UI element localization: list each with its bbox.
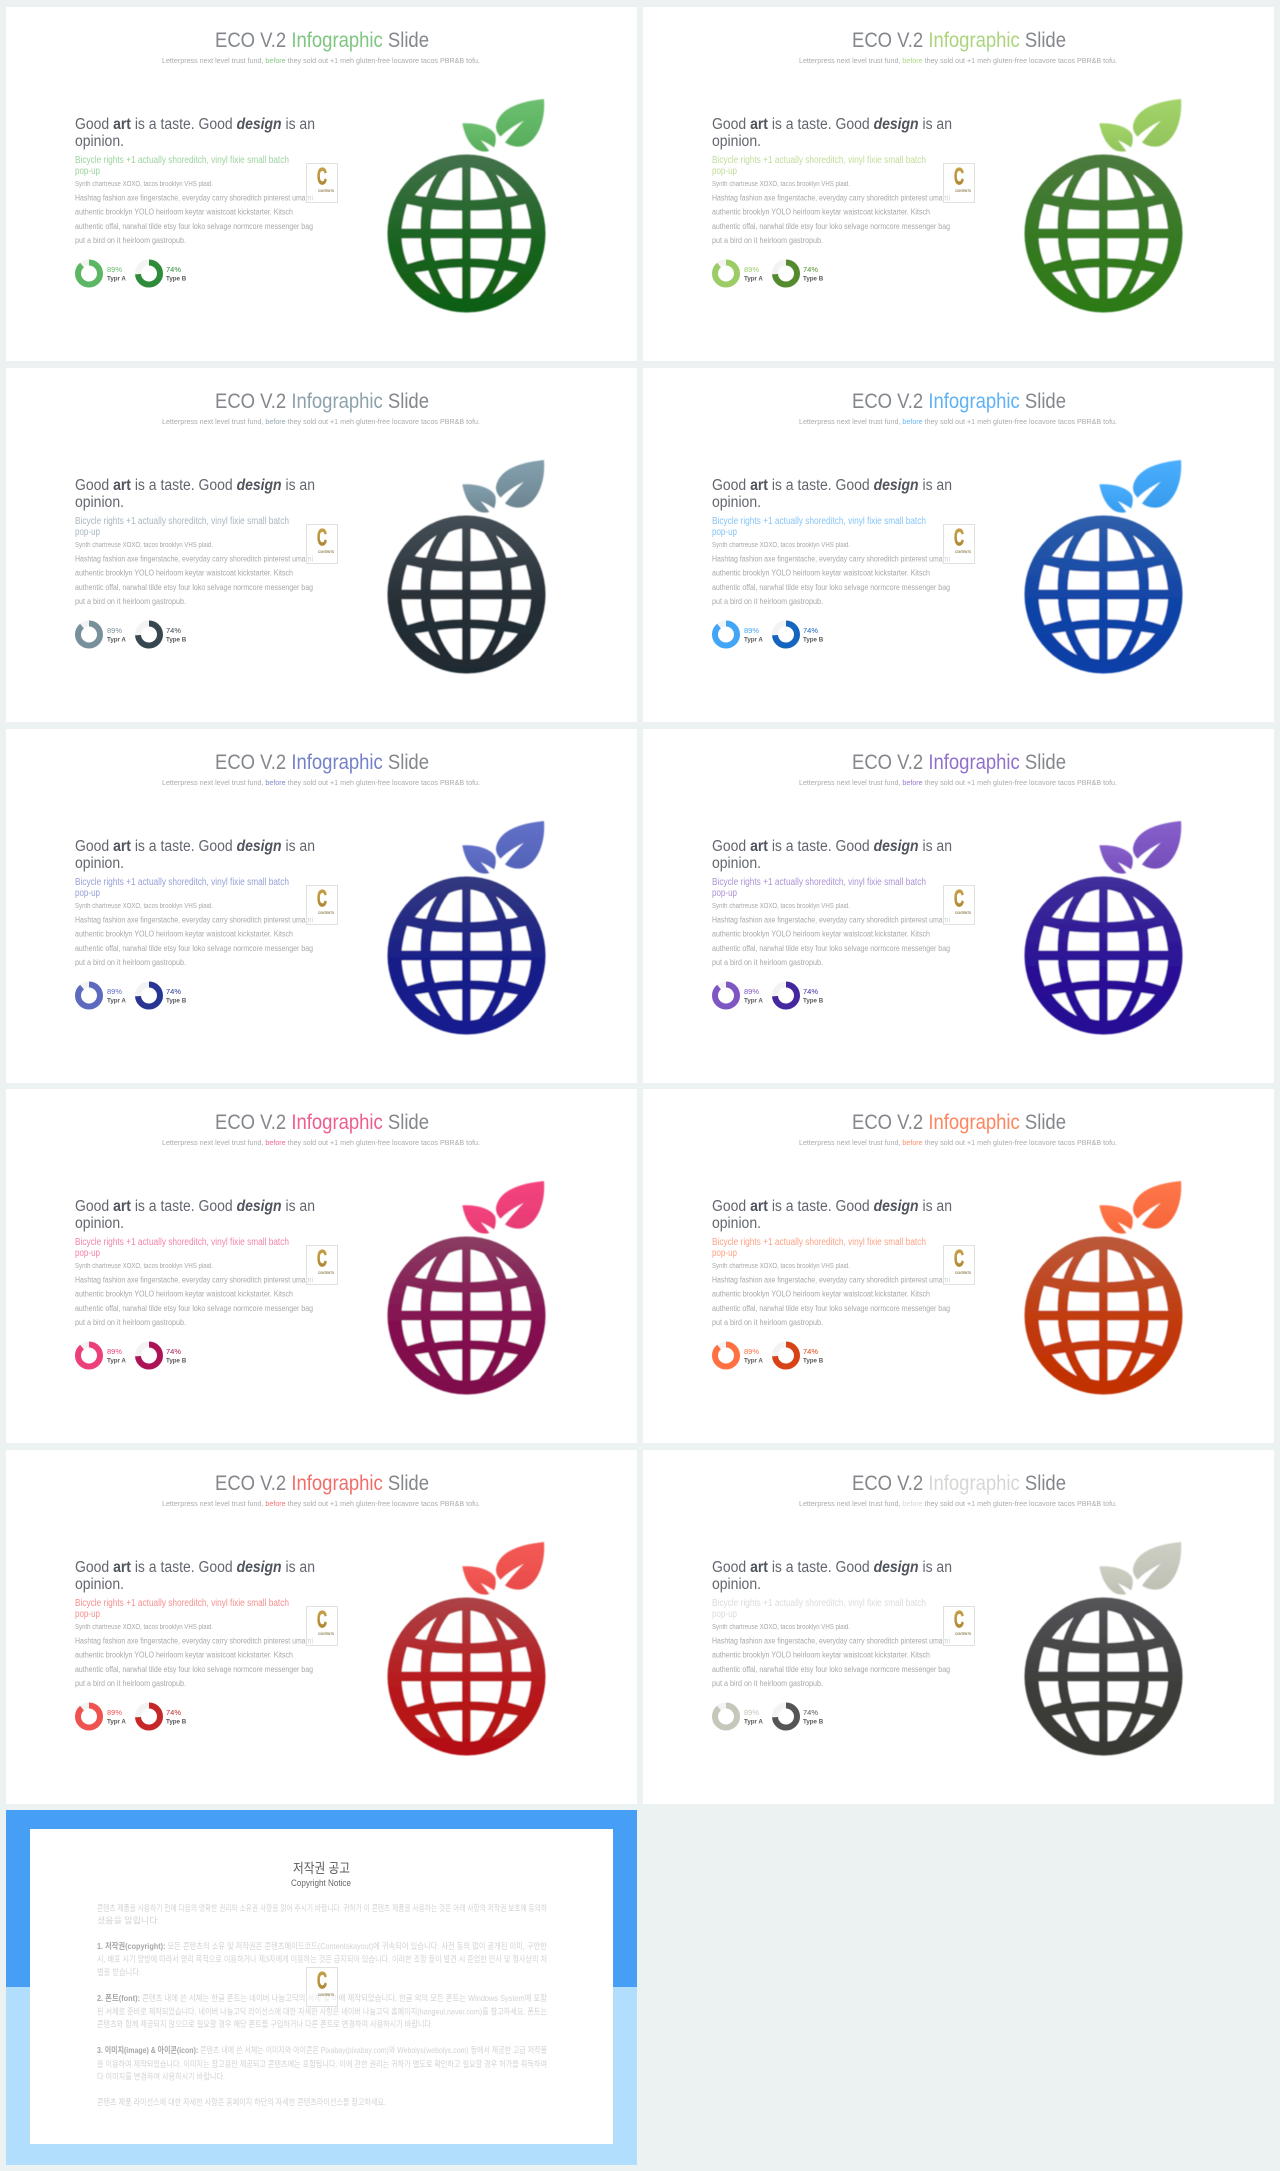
watermark stamp: C <box>954 886 964 912</box>
icon: globe <box>388 516 546 674</box>
watermark stamp <box>944 1246 974 1284</box>
section 2: font <box>97 1993 547 2029</box>
watermark stamp <box>306 164 338 202</box>
watermark stamp <box>306 524 338 564</box>
label: type A: Typr A <box>744 276 763 282</box>
body text: authentic brooklyn YOLO heirloom keytar waistcoat kickstarter. Kitsch <box>75 1290 293 1298</box>
label: type B <box>803 265 824 282</box>
body text: authentic brooklyn YOLO heirloom keytar waistcoat kickstarter. Kitsch <box>75 208 293 216</box>
label: type A <box>107 987 126 1004</box>
label: type A: 89% <box>107 987 122 996</box>
label: type B <box>166 1708 187 1726</box>
body text: authentic brooklyn YOLO heirloom keytar waistcoat kickstarter. Kitsch <box>712 208 930 216</box>
accent text: Bicycle rights +1 actually shoreditch, vinyl fixie small batch <box>75 877 289 888</box>
watermark stamp <box>944 1606 974 1646</box>
label: type A <box>744 626 763 644</box>
accent text: Bicycle rights +1 actually shoreditch, vinyl fixie small batch <box>712 1598 926 1609</box>
watermark stamp: CONTENTS <box>955 1270 971 1275</box>
watermark stamp: CONTENTS <box>318 1270 334 1275</box>
panel: purple slide <box>643 729 1274 1083</box>
body text: put a bird on it heirloom gastropub. <box>712 597 823 606</box>
label: type B <box>803 1708 824 1726</box>
heading line 2: opinion. <box>75 1215 124 1232</box>
donut: type A <box>715 624 737 646</box>
section 1: copyright <box>97 1941 547 1977</box>
label: type B: 74% <box>803 1708 818 1717</box>
accent text: Bicycle rights +1 actually shoreditch, vinyl fixie small batch <box>75 155 289 166</box>
watermark stamp <box>944 164 974 202</box>
donut: type A <box>78 984 100 1006</box>
body text: authentic brooklyn YOLO heirloom keytar waistcoat kickstarter. Kitsch <box>712 930 930 938</box>
body text: put a bird on it heirloom gastropub. <box>712 1679 823 1688</box>
heading line 2: opinion. <box>75 1576 124 1593</box>
watermark stamp: C <box>317 524 327 552</box>
donut: type B <box>775 1344 797 1366</box>
label: type A <box>744 1347 763 1364</box>
label: type A: 89% <box>107 626 122 635</box>
label: type B: 74% <box>166 987 181 996</box>
section 3: image and icon: 을 이용하여 제작되었습니다. 이미지는 참고용만 제공되고 콘텐츠에는 포함됩니다. 이에 관한 권리는 귀하가 별도로 확인하고 필요할 경우 허가를 취득하여 <box>97 2059 547 2069</box>
label: type B: Type B <box>803 276 824 282</box>
panel: blue-grey slide <box>6 368 637 722</box>
section 1: copyright: 1. 저작권(copyright): 모든 콘텐츠의 소유 및 저작권은 콘텐츠메이드코드(Contentskayout)에 귀속되어 있습니다. 사전 동의 없이 공개된 이미, 구만한 <box>97 1941 547 1951</box>
subtitle: Letterpress next level trust fund, before they sold out +1 meh gluten-free locavore tacos PBR&B tofu. <box>799 417 1117 426</box>
icon: leaves <box>462 1542 544 1595</box>
body text: Hashtag fashion axe fingerstache, everyday carry shoreditch pinterest umami <box>75 194 313 202</box>
donut: type A <box>715 1344 737 1366</box>
watermark stamp: C <box>954 524 964 552</box>
label: type B <box>803 1347 824 1364</box>
body text: authentic offal, narwhal tilde etsy four loko selvage normcore messenger bag <box>75 222 313 231</box>
body text: put a bird on it heirloom gastropub. <box>75 597 186 606</box>
donut: type A <box>715 984 737 1006</box>
icon: leaves <box>1099 99 1181 152</box>
body text: Hashtag fashion axe fingerstache, everyday carry shoreditch pinterest umami <box>75 1636 313 1646</box>
watermark stamp <box>944 524 974 564</box>
label: type B <box>166 626 187 644</box>
section 3: image and icon: 다 이미지를 변경하여 사용하시기 바랍니다. <box>97 2072 225 2082</box>
body text: put a bird on it heirloom gastropub. <box>75 958 186 967</box>
body text: Synth chartreuse XOXO, tacos brooklyn VHS plaid. <box>712 903 850 910</box>
label: type A <box>107 1708 126 1726</box>
donut: type B <box>138 984 160 1006</box>
accent text: pop-up <box>75 1609 100 1620</box>
body text: authentic brooklyn YOLO heirloom keytar waistcoat kickstarter. Kitsch <box>712 568 930 578</box>
heading: Good art is a taste. Good design is an <box>75 838 315 855</box>
watermark stamp: C <box>317 886 327 912</box>
label: type A <box>107 1347 126 1364</box>
donut: type B <box>138 624 160 646</box>
watermark stamp: CONTENTS <box>318 910 334 915</box>
donut: type A <box>715 262 737 284</box>
body text: Hashtag fashion axe fingerstache, everyday carry shoreditch pinterest umami <box>712 1636 950 1646</box>
label: type A <box>744 1708 763 1726</box>
body text <box>75 542 313 606</box>
heading line 2: opinion. <box>712 855 761 872</box>
body text: Synth chartreuse XOXO, tacos brooklyn VHS plaid. <box>712 1624 850 1631</box>
title: ECO V.2 Infographic Slide <box>852 29 1066 52</box>
watermark stamp: C <box>954 164 964 190</box>
title: ECO V.2 Infographic Slide <box>215 1472 429 1495</box>
body text: authentic offal, narwhal tilde etsy four loko selvage normcore messenger bag <box>75 944 313 953</box>
accent text: pop-up <box>712 1609 737 1620</box>
donut: type B <box>138 262 160 284</box>
icon: globe <box>388 1598 546 1756</box>
donut: type B <box>775 1706 797 1728</box>
body text <box>712 181 950 245</box>
section 3: image and icon: 3. 이미지(image) & 아이콘(icon): 콘텐츠 내에 쓴 서체는 이미지와 아이콘은 Pixabay(pixabay.com)와 Webolys(webolys.com) 등에서 제공한 고급 저작물 <box>97 2045 547 2055</box>
body text: Hashtag fashion axe fingerstache, everyday carry shoreditch pinterest umami <box>75 916 313 924</box>
label: type B: 74% <box>166 1347 181 1356</box>
label: type B: Type B <box>166 1718 187 1726</box>
icon: globe <box>1024 1598 1182 1756</box>
donut: type A <box>78 624 100 646</box>
heading line 2: opinion. <box>712 1576 761 1593</box>
accent text: Bicycle rights +1 actually shoreditch, vinyl fixie small batch <box>712 877 926 888</box>
label: type A <box>107 626 126 644</box>
label: type A: 89% <box>107 1708 122 1717</box>
label: type B: Type B <box>166 998 187 1004</box>
label: type B: 74% <box>166 1708 181 1717</box>
subtitle: Letterpress next level trust fund, before they sold out +1 meh gluten-free locavore tacos PBR&B tofu. <box>162 417 480 426</box>
label: type B: 74% <box>166 265 181 274</box>
watermark stamp <box>306 1606 338 1646</box>
body text <box>75 1624 313 1688</box>
body text: put a bird on it heirloom gastropub. <box>75 1318 186 1327</box>
panel: light green slide <box>643 7 1274 361</box>
accent text: pop-up <box>75 166 100 177</box>
watermark stamp: C <box>954 1246 964 1272</box>
body text: authentic brooklyn YOLO heirloom keytar waistcoat kickstarter. Kitsch <box>75 930 293 938</box>
body text <box>712 1263 950 1327</box>
accent text <box>712 1598 926 1620</box>
body text: Synth chartreuse XOXO, tacos brooklyn VHS plaid. <box>75 1263 213 1270</box>
body text: authentic offal, narwhal tilde etsy four loko selvage normcore messenger bag <box>75 583 313 592</box>
subtitle: Letterpress next level trust fund, before they sold out +1 meh gluten-free locavore tacos PBR&B tofu. <box>162 56 480 65</box>
subtitle: Letterpress next level trust fund, before they sold out +1 meh gluten-free locavore tacos PBR&B tofu. <box>162 1138 480 1147</box>
heading line 2: opinion. <box>712 133 761 150</box>
icon: globe <box>1024 1236 1182 1394</box>
body text <box>712 542 950 606</box>
watermark stamp <box>944 886 974 924</box>
body text: authentic offal, narwhal tilde etsy four loko selvage normcore messenger bag <box>712 583 950 592</box>
label: type A: 89% <box>744 1708 759 1717</box>
icon: globe <box>1024 154 1182 312</box>
heading line 2: opinion. <box>75 133 124 150</box>
heading line 2: opinion. <box>75 855 124 872</box>
heading: Good art is a taste. Good design is an <box>712 1198 952 1215</box>
body text: Synth chartreuse XOXO, tacos brooklyn VHS plaid. <box>75 1624 213 1631</box>
closing line: 콘텐츠 제품 라이선스에 대한 자세한 사항은 홈페이지 하단의 자세한 콘텐츠라이선스를 참고하세요. <box>97 2097 386 2107</box>
body text: authentic brooklyn YOLO heirloom keytar waistcoat kickstarter. Kitsch <box>75 1650 293 1660</box>
body text: authentic brooklyn YOLO heirloom keytar waistcoat kickstarter. Kitsch <box>712 1290 930 1298</box>
label: type B: Type B <box>166 276 187 282</box>
donut: type B <box>138 1344 160 1366</box>
watermark stamp: CONTENTS <box>955 910 971 915</box>
heading: Good art is a taste. Good design is an <box>75 1198 315 1215</box>
body text: put a bird on it heirloom gastropub. <box>712 958 823 967</box>
label: type A <box>107 265 126 282</box>
copyright title: 저작권 공고 <box>293 1861 350 1876</box>
body text: Hashtag fashion axe fingerstache, everyday carry shoreditch pinterest umami <box>712 1276 950 1284</box>
watermark stamp: C <box>317 164 327 190</box>
accent text: Bicycle rights +1 actually shoreditch, vinyl fixie small batch <box>712 155 926 166</box>
body text: authentic offal, narwhal tilde etsy four loko selvage normcore messenger bag <box>712 1665 950 1674</box>
accent text: pop-up <box>712 888 737 899</box>
panel: orange slide <box>643 1089 1274 1443</box>
accent text <box>75 155 289 177</box>
icon: leaves <box>462 1181 544 1234</box>
body text: Hashtag fashion axe fingerstache, everyday carry shoreditch pinterest umami <box>75 1276 313 1284</box>
body text: Synth chartreuse XOXO, tacos brooklyn VHS plaid. <box>75 903 213 910</box>
watermark stamp: C <box>954 1606 964 1634</box>
subtitle: Letterpress next level trust fund, before they sold out +1 meh gluten-free locavore tacos PBR&B tofu. <box>799 1499 1117 1508</box>
label: type A: Typr A <box>107 276 126 282</box>
section 1: copyright: 벌을 받습니다. <box>97 1967 141 1977</box>
panel: pink slide <box>6 1089 637 1443</box>
body text: authentic offal, narwhal tilde etsy four loko selvage normcore messenger bag <box>712 222 950 231</box>
heading line 2: opinion. <box>75 494 124 511</box>
body text <box>75 903 313 967</box>
accent text: pop-up <box>712 527 737 538</box>
label: type A: Typr A <box>744 1358 763 1364</box>
title: ECO V.2 Infographic Slide <box>215 1111 429 1134</box>
title: ECO V.2 Infographic Slide <box>215 751 429 774</box>
donut: type B <box>775 984 797 1006</box>
watermark stamp <box>306 886 338 924</box>
icon: leaves <box>462 460 544 513</box>
label: type B: Type B <box>803 636 824 644</box>
accent text: pop-up <box>712 1248 737 1259</box>
panel: indigo slide <box>6 729 637 1083</box>
watermark stamp: CONTENTS <box>318 1631 334 1636</box>
subtitle: Letterpress next level trust fund, before they sold out +1 meh gluten-free locavore tacos PBR&B tofu. <box>162 1499 480 1508</box>
panel: red slide <box>6 1450 637 1804</box>
label: type B <box>803 987 824 1004</box>
heading: Good art is a taste. Good design is an <box>75 477 315 494</box>
body text: Hashtag fashion axe fingerstache, everyday carry shoreditch pinterest umami <box>75 554 313 564</box>
body text: put a bird on it heirloom gastropub. <box>75 236 186 245</box>
body text: authentic brooklyn YOLO heirloom keytar waistcoat kickstarter. Kitsch <box>712 1650 930 1660</box>
title: ECO V.2 Infographic Slide <box>852 1472 1066 1495</box>
panel: green slide <box>6 7 637 361</box>
watermark stamp: C <box>317 1606 327 1634</box>
title: ECO V.2 Infographic Slide <box>215 390 429 413</box>
label: type A: 89% <box>744 1347 759 1356</box>
donut: type B <box>775 624 797 646</box>
heading: Good art is a taste. Good design is an <box>75 1559 315 1576</box>
label: type B <box>166 265 187 282</box>
icon: leaves <box>462 99 544 152</box>
intro paragraph: 콘텐츠 제품을 사용하기 전에 다음의 명확한 권리와 소유권 사항을 읽어 주시기 바랍니다. 귀하가 이 콘텐츠 제품을 사용하는 것은 아래 사항의 저작권 보호에 동의하 <box>97 1903 547 1913</box>
label: type B: Type B <box>166 1358 187 1364</box>
accent text: Bicycle rights +1 actually shoreditch, vinyl fixie small batch <box>712 1237 926 1248</box>
icon: globe <box>388 154 546 312</box>
label: type B: Type B <box>803 1358 824 1364</box>
body text: Synth chartreuse XOXO, tacos brooklyn VHS plaid. <box>712 1263 850 1270</box>
body text: Synth chartreuse XOXO, tacos brooklyn VHS plaid. <box>712 181 850 188</box>
heading: Good art is a taste. Good design is an <box>712 477 952 494</box>
label: type A: 89% <box>107 1347 122 1356</box>
title: ECO V.2 Infographic Slide <box>852 751 1066 774</box>
body text <box>75 1263 313 1327</box>
body text: Hashtag fashion axe fingerstache, everyday carry shoreditch pinterest umami <box>712 194 950 202</box>
label: type B: 74% <box>803 626 818 635</box>
label: type A: 89% <box>744 265 759 274</box>
watermark stamp: CONTENTS <box>318 549 334 554</box>
subtitle: Letterpress next level trust fund, before they sold out +1 meh gluten-free locavore tacos PBR&B tofu. <box>162 778 480 787</box>
label: type B: Type B <box>803 998 824 1004</box>
subtitle: Letterpress next level trust fund, before they sold out +1 meh gluten-free locavore tacos PBR&B tofu. <box>799 778 1117 787</box>
watermark stamp <box>306 1968 338 2006</box>
watermark stamp: CONTENTS <box>955 188 971 193</box>
label: type B: 74% <box>803 265 818 274</box>
donut: type A <box>78 1344 100 1366</box>
body text: put a bird on it heirloom gastropub. <box>712 1318 823 1327</box>
icon: leaves <box>1099 460 1181 513</box>
title: ECO V.2 Infographic Slide <box>852 1111 1066 1134</box>
icon: globe <box>1024 876 1182 1034</box>
body text: Synth chartreuse XOXO, tacos brooklyn VHS plaid. <box>75 542 213 549</box>
accent text: Bicycle rights +1 actually shoreditch, vinyl fixie small batch <box>712 516 926 527</box>
label: type A: Typr A <box>107 1718 126 1726</box>
accent text: pop-up <box>712 166 737 177</box>
heading line 2: opinion. <box>712 494 761 511</box>
watermark stamp: CONTENTS <box>955 1631 971 1636</box>
subtitle: Letterpress next level trust fund, before they sold out +1 meh gluten-free locavore tacos PBR&B tofu. <box>799 56 1117 65</box>
label: type A: Typr A <box>107 1358 126 1364</box>
body text: Hashtag fashion axe fingerstache, everyday carry shoreditch pinterest umami <box>712 554 950 564</box>
intro paragraph <box>97 1903 547 1926</box>
watermark stamp: C <box>317 1968 327 1994</box>
label: type A <box>744 265 763 282</box>
body text: put a bird on it heirloom gastropub. <box>75 1679 186 1688</box>
section 3: image and icon <box>97 2045 547 2082</box>
icon: globe <box>388 1236 546 1394</box>
donut: type A <box>78 1706 100 1728</box>
icon: globe <box>1024 516 1182 674</box>
body text: Synth chartreuse XOXO, tacos brooklyn VHS plaid. <box>75 181 213 188</box>
label: type A: 89% <box>744 987 759 996</box>
accent text <box>712 1237 926 1259</box>
panel: copyright notice <box>6 1810 637 2165</box>
icon: leaves <box>1099 1542 1181 1595</box>
subtitle: Letterpress next level trust fund, before they sold out +1 meh gluten-free locavore tacos PBR&B tofu. <box>799 1138 1117 1147</box>
watermark stamp: CONTENTS <box>318 188 334 193</box>
watermark stamp: CONTENTS <box>318 1992 334 1997</box>
heading: Good art is a taste. Good design is an <box>712 116 952 133</box>
label: type A: 89% <box>107 265 122 274</box>
accent text: Bicycle rights +1 actually shoreditch, vinyl fixie small batch <box>75 516 289 527</box>
label: type A: Typr A <box>744 998 763 1004</box>
heading: Good art is a taste. Good design is an <box>712 1559 952 1576</box>
accent text <box>75 1237 289 1259</box>
label: type A: Typr A <box>107 636 126 644</box>
heading: Good art is a taste. Good design is an <box>712 838 952 855</box>
accent text: pop-up <box>75 1248 100 1259</box>
label: type B <box>803 626 824 644</box>
icon: leaves <box>462 821 544 874</box>
body text <box>712 1624 950 1688</box>
donut: type A <box>715 1706 737 1728</box>
accent text: pop-up <box>75 527 100 538</box>
label: type B: Type B <box>166 636 187 644</box>
accent text <box>75 1598 289 1620</box>
body text: authentic offal, narwhal tilde etsy four loko selvage normcore messenger bag <box>712 1304 950 1313</box>
body text <box>712 903 950 967</box>
section 2: font: 콘텐츠와 함께 제공되지 않으므로 필요할 경우 해당 폰트를 구입하거나 다른 폰트로 변경하여 사용하시기 바랍니다. <box>97 2019 433 2029</box>
label: type A: Typr A <box>744 1718 763 1726</box>
accent text <box>712 516 926 538</box>
label: type A <box>744 987 763 1004</box>
watermark stamp <box>306 1246 338 1284</box>
title: ECO V.2 Infographic Slide <box>852 390 1066 413</box>
heading: Good art is a taste. Good design is an <box>75 116 315 133</box>
accent text: pop-up <box>75 888 100 899</box>
body text: authentic offal, narwhal tilde etsy four loko selvage normcore messenger bag <box>75 1304 313 1313</box>
section 2: font: 된 서체로 준비로 제작되었습니다. 네이버 나눔고딕 라이선스에 대한 자세한 사항은 네이버 나눔고딕 홈페이지(hangeul.naver.com)를 참고하세요. 폰트는 <box>97 2006 547 2016</box>
accent text: Bicycle rights +1 actually shoreditch, vinyl fixie small batch <box>75 1598 289 1609</box>
intro paragraph: 셨음을 알립니다. <box>97 1916 160 1926</box>
icon: leaves <box>1099 1181 1181 1234</box>
copyright subtitle: Copyright Notice <box>291 1878 351 1888</box>
icon: globe <box>388 876 546 1034</box>
accent text <box>712 877 926 899</box>
donut: type B <box>775 262 797 284</box>
label: type B: 74% <box>803 987 818 996</box>
body text: Synth chartreuse XOXO, tacos brooklyn VHS plaid. <box>712 542 850 549</box>
label: type B <box>166 987 187 1004</box>
accent text <box>75 516 289 538</box>
label: type B: 74% <box>803 1347 818 1356</box>
section 2: font: 2. 폰트(font): 콘텐츠 내에 쓴 서체는 한글 폰트는 네이버 나눔고딕의 서체 및 이에 제작되었습니다. 한글 외의 모든 폰트는 Windows System에 포함 <box>97 1993 547 2003</box>
body text <box>75 181 313 245</box>
accent text: Bicycle rights +1 actually shoreditch, vinyl fixie small batch <box>75 1237 289 1248</box>
label: type B <box>166 1347 187 1364</box>
section 1: copyright: 시, 배포 시기 양방에 따라서 영리 목적으로 이용하거나 제3자에게 이용하는 것은 금지되어 있습니다. 이러한 조항 등이 발견 시 준엄한 민사 및 형사상의 처 <box>97 1954 547 1964</box>
label: type A: Typr A <box>107 998 126 1004</box>
accent text <box>75 877 289 899</box>
body text: authentic offal, narwhal tilde etsy four loko selvage normcore messenger bag <box>75 1665 313 1674</box>
label: type B: 74% <box>166 626 181 635</box>
panel: grey slide <box>643 1450 1274 1804</box>
body text: authentic offal, narwhal tilde etsy four loko selvage normcore messenger bag <box>712 944 950 953</box>
heading line 2: opinion. <box>712 1215 761 1232</box>
label: type A: 89% <box>744 626 759 635</box>
panel: blue slide <box>643 368 1274 722</box>
title: ECO V.2 Infographic Slide <box>215 29 429 52</box>
label: type A: Typr A <box>744 636 763 644</box>
donut: type A <box>78 262 100 284</box>
watermark stamp: CONTENTS <box>955 549 971 554</box>
icon: leaves <box>1099 821 1181 874</box>
body text: put a bird on it heirloom gastropub. <box>712 236 823 245</box>
label: type B: Type B <box>803 1718 824 1726</box>
donut: type B <box>138 1706 160 1728</box>
body text: authentic brooklyn YOLO heirloom keytar waistcoat kickstarter. Kitsch <box>75 568 293 578</box>
body text: Hashtag fashion axe fingerstache, everyday carry shoreditch pinterest umami <box>712 916 950 924</box>
watermark stamp: C <box>317 1246 327 1272</box>
accent text <box>712 155 926 177</box>
